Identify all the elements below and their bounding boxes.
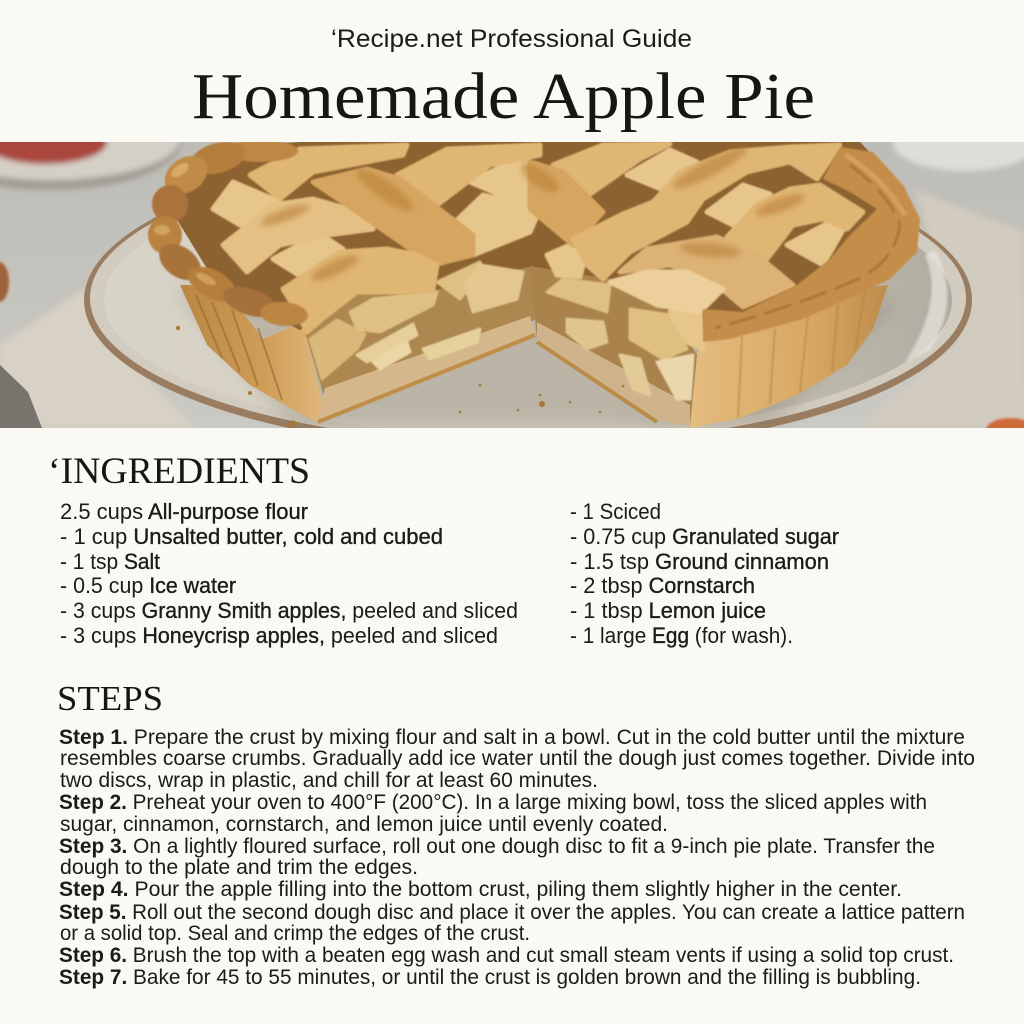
right cut face: filling (530, 266, 697, 426)
crimped rim, right (703, 147, 920, 342)
step 1: resembles coarse crumbs. Gradually add ice water until the dough just comes together. Divide into (60, 747, 975, 770)
under strips (213, 150, 843, 349)
crimped rim, left (148, 136, 309, 328)
pie shadow (175, 290, 900, 428)
ingredient: ice water: - 0.5 cup Ice water (60, 573, 236, 598)
fluting, right wall (738, 292, 865, 418)
step 4: Step 4. Pour the apple filling into the bottom crust, piling them slightly higher in the center. (59, 878, 902, 901)
left cut face: filling (303, 262, 535, 422)
front and wavy strips (283, 145, 863, 332)
lattice strips (213, 144, 863, 349)
step 6: Step 6. Brush the top with a beaten egg wash and cut small steam vents if using a solid top crust. (59, 944, 954, 967)
pie right outer wall (690, 285, 888, 428)
linen cloth, right (894, 192, 1024, 406)
step 2: sugar, cinnamon, cornstarch, and lemon juice until evenly coated. (60, 813, 668, 836)
apple at left edge (0, 262, 9, 302)
ingredient: cornstarch: - 2 tbsp Cornstarch (570, 573, 755, 598)
step 2: Step 2. Preheat your oven to 400°F (200°C). In a large mixing bowl, toss the sliced apples with (59, 791, 927, 814)
step 5: Step 5. Roll out the second dough disc and place it over the apples. You can create a lattice pattern (59, 901, 965, 924)
ceramic plate (84, 216, 972, 428)
ingredient: salt: - 1 tsp Salt (60, 549, 160, 574)
ingredients list, left column (60, 499, 518, 648)
strips down to the right (313, 162, 603, 265)
ingredient: lemon juice: - 1 tbsp Lemon juice (570, 598, 766, 623)
apple at bottom right (984, 416, 1024, 428)
apple chunks, left (310, 262, 523, 379)
bowl, top right (892, 142, 1024, 173)
ingredient: egg: - 1 large Egg (for wash). (570, 623, 793, 648)
step 1: Step 1. Prepare the crust by mixing flour and salt in a bowl. Cut in the cold butter until the mixture (59, 726, 965, 749)
pastry crumbs on plate (176, 326, 624, 428)
small plate with apple, top left (0, 142, 182, 192)
table background (0, 142, 1024, 428)
step 3: Step 3. On a lightly floured surface, roll out one dough disc to fit a 9-inch pie plate. Transfer the (59, 835, 935, 858)
step 1: two discs, wrap in plastic, and chill for at least 60 minutes. (60, 769, 598, 792)
cross strips up to the right (223, 144, 670, 272)
ingredient: cinnamon: - 1.5 tsp Ground cinnamon (570, 549, 829, 574)
step 3: dough to the plate and trim the edges. (60, 856, 418, 879)
heading: ingredients: ‘INGREDIENTS (48, 451, 310, 492)
knife (0, 365, 42, 428)
hero photo: apple pie (0, 142, 1024, 428)
step 1 (59, 726, 975, 792)
ingredients list, right column (570, 499, 839, 648)
browned highlights on crust (259, 141, 807, 285)
apple chunks, right (547, 279, 693, 399)
ingredient: butter: - 1 cup Unsalted butter, cold and cubed (60, 524, 443, 549)
step 5 (59, 901, 965, 945)
steps text block (59, 726, 975, 989)
step 3 (59, 835, 935, 879)
pie top: dark gaps and base (165, 142, 905, 335)
subtitle: ‘Recipe.net Professional Guide (331, 25, 692, 53)
ingredient: sugar: - 0.75 cup Granulated sugar (570, 524, 839, 549)
ingredient: sciced: - 1 Sciced (570, 499, 661, 524)
step 7: Step 7. Bake for 45 to 55 minutes, or until the crust is golden brown and the filling is bubbling. (59, 966, 921, 989)
pie left outer wall (180, 285, 323, 422)
ingredient: flour: 2.5 cups All-purpose flour (60, 499, 308, 524)
ingredient: granny smith: - 3 cups Granny Smith apples, peeled and sliced (60, 598, 518, 623)
ingredient: honeycrisp: - 3 cups Honeycrisp apples, peeled and sliced (60, 623, 498, 648)
linen cloth, left (0, 288, 195, 428)
heading: steps: STEPS (57, 679, 163, 718)
step 5: or a solid top. Seal and crimp the edges of the crust. (60, 922, 530, 945)
fluting, left wall (196, 295, 282, 400)
title: Homemade Apple Pie (192, 60, 815, 133)
step 2 (59, 791, 927, 836)
